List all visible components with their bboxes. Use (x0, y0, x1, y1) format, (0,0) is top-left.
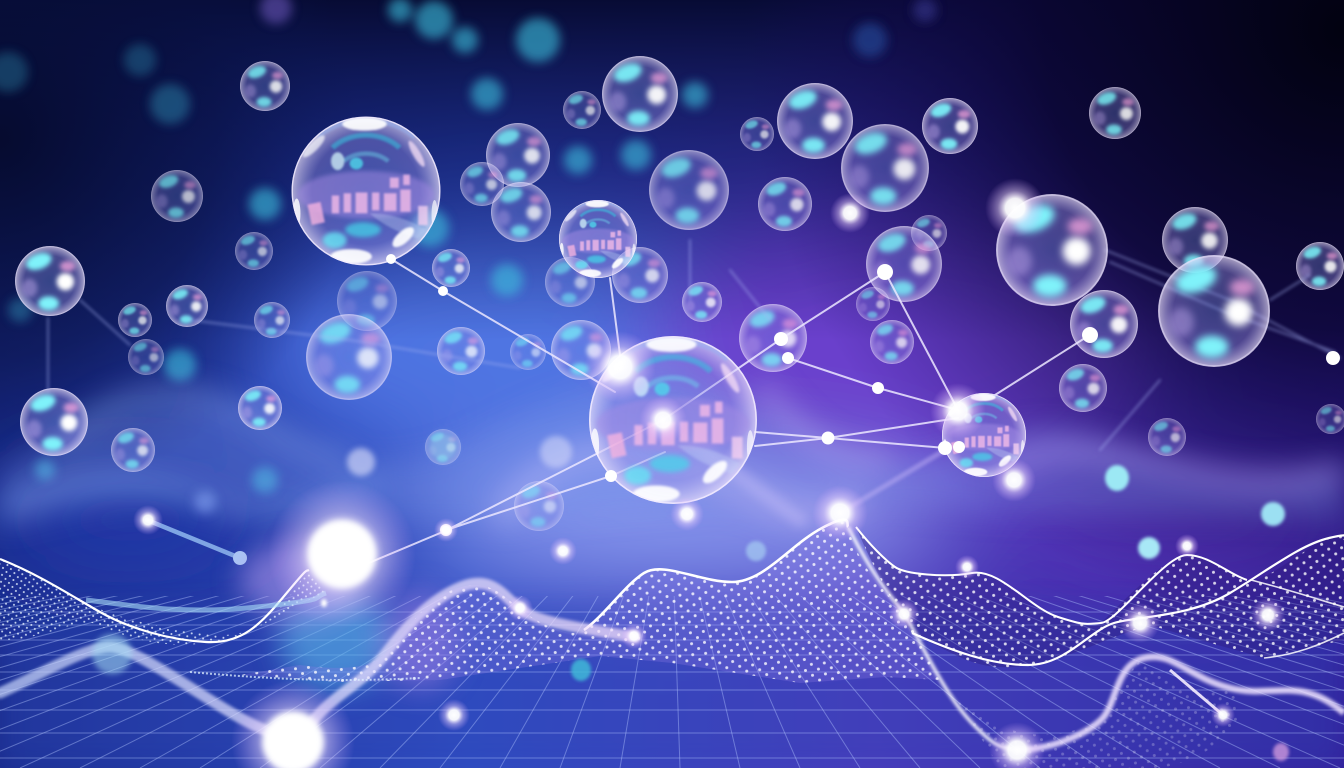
distant small bubbles (15, 56, 1344, 531)
teal and lavender haze under the left glow (240, 540, 460, 690)
mesh lower fine thread (190, 672, 420, 680)
cyan light dots (321, 465, 1289, 761)
dot mesh wave: left (0, 559, 326, 645)
main bright wave line (848, 527, 1015, 750)
medium bubble: right hub (942, 393, 1026, 477)
soft ribbon line: left (0, 583, 635, 737)
floor panel (0, 596, 1344, 768)
medium bubble: near centre (559, 200, 637, 278)
translucent lower mesh (950, 658, 1239, 768)
network connection lines (48, 240, 1340, 575)
large bubble: far right (1158, 255, 1270, 367)
dot mesh wave: right (856, 527, 1344, 667)
large bubble: upper right (996, 194, 1108, 306)
large bubble: centre hub (589, 336, 757, 504)
ribbon branch line (1170, 670, 1223, 715)
network nodes (233, 254, 1340, 565)
light glows (92, 178, 1285, 768)
soft ribbon line: right (1015, 657, 1344, 750)
dot mesh wave: centre (240, 520, 940, 683)
blurred background waves (0, 382, 1344, 530)
perspective grid (0, 596, 1344, 768)
large bubble: upper left (292, 116, 440, 266)
blurred bokeh dots (0, 0, 937, 513)
